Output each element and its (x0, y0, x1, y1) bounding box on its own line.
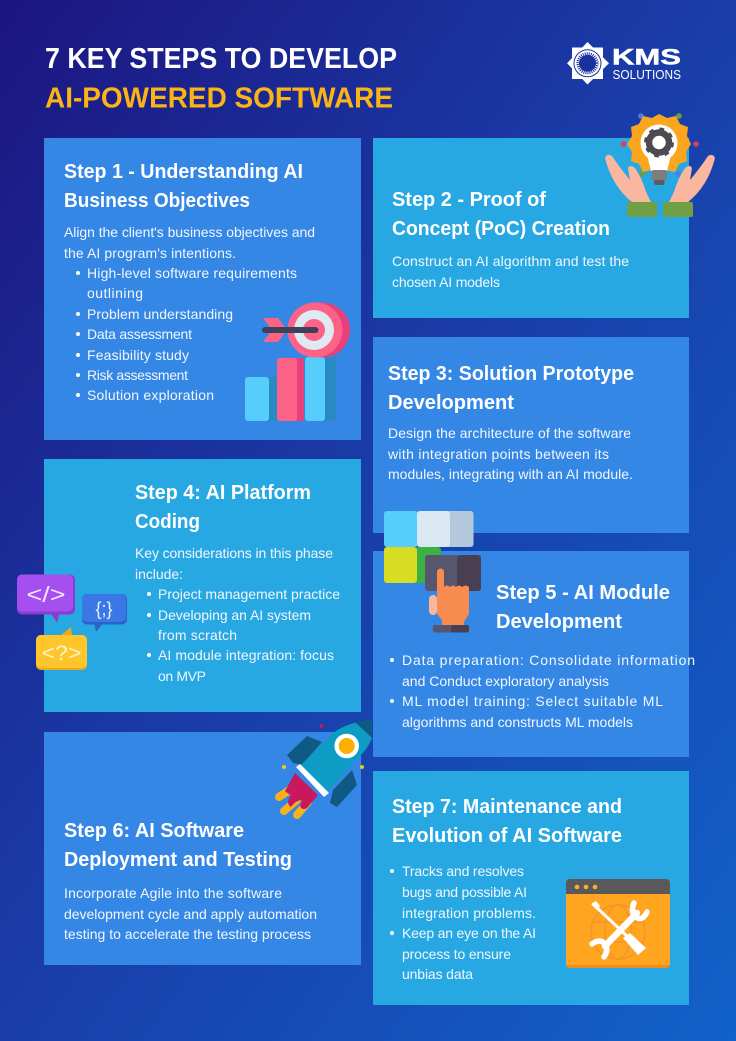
icon: code chat bubbles: <?> (42, 642, 82, 665)
heading: step 2: Step 2 - Proof of (392, 188, 546, 211)
heading: step 5: Step 5 - AI Module (496, 581, 670, 604)
heading: step 3 (388, 362, 634, 414)
heading: step 5 (496, 581, 670, 633)
heading: step 7: Step 7: Maintenance and (392, 795, 622, 818)
heading: step 5: Development (496, 610, 622, 633)
heading: step 2 (392, 188, 610, 240)
list: step 7 bullets (390, 863, 536, 982)
heading: step 7: Evolution of AI Software (392, 824, 622, 847)
heading: step 1: Business Objectives (64, 189, 250, 212)
logo: KMS Solutions (567, 42, 681, 84)
list: step 5 bullets: ML model training: Select suitable ML (402, 693, 663, 709)
text: step 4 intro: Key considerations in this phase (135, 545, 333, 561)
list: step 1 bullets: High-level software requirements (87, 265, 297, 281)
title: AI-POWERED SOFTWARE (45, 82, 393, 114)
list: step 4 bullets: AI module integration: focus (158, 647, 334, 663)
text: step 2 body: Construct an AI algorithm and test the (392, 253, 629, 269)
list: step 1 bullets: Feasibility study (87, 347, 189, 363)
icon: hand pressing colour tiles (384, 511, 481, 632)
list: step 7 bullets: integration problems. (402, 905, 536, 921)
panel: step 3 (373, 337, 689, 533)
heading: step 4: Step 4: AI Platform (135, 481, 311, 504)
panel: step 1 (44, 138, 361, 440)
panel: step 2 (373, 138, 689, 318)
heading: step 6: Deployment and Testing (64, 848, 292, 871)
text: step 6 body (64, 885, 317, 942)
list: step 4 bullets: from scratch (158, 627, 237, 643)
list: step 5 bullets (390, 652, 695, 730)
logo: KMS Solutions: KMS (612, 44, 681, 70)
list: step 7 bullets: Tracks and resolves (402, 863, 524, 879)
title (45, 43, 397, 114)
text: step 3 body: modules, integrating with an AI module. (388, 466, 633, 482)
list: step 1 bullets: Problem understanding (87, 306, 233, 322)
text: step 4 intro (135, 545, 333, 582)
title: 7 KEY STEPS TO DEVELOP (45, 43, 397, 75)
list: step 7 bullets: process to ensure (402, 946, 511, 962)
list: step 7 bullets: unbias data (402, 966, 473, 982)
text: step 1 intro: the AI program's intentions. (64, 245, 236, 261)
icon: light bulb with gear held by hands (605, 113, 715, 217)
text: step 6 body: development cycle and apply automation (64, 906, 317, 922)
icon: code chat bubbles: {;} (95, 599, 113, 619)
icon: browser window with tools (566, 879, 670, 968)
list: step 5 bullets: algorithms and constructs ML models (402, 714, 633, 730)
text: step 1 intro: Align the client's business objectives and (64, 224, 315, 240)
text: step 6 body: testing to accelerate the testing process (64, 926, 311, 942)
heading: step 2: Concept (PoC) Creation (392, 217, 610, 240)
heading: step 3: Development (388, 391, 514, 414)
list: step 4 bullets (147, 586, 340, 684)
heading: step 1: Step 1 - Understanding AI (64, 160, 303, 183)
list: step 5 bullets: Data preparation: Consolidate information (402, 652, 695, 668)
panel: step 7 (373, 771, 689, 1005)
heading: step 4: Coding (135, 510, 200, 533)
list: step 1 bullets (76, 265, 297, 403)
heading: step 4 (135, 481, 311, 533)
text: step 3 body (387, 425, 633, 482)
logo: KMS Solutions: SOLUTIONS (612, 68, 681, 82)
list: step 7 bullets: bugs and possible AI (402, 884, 527, 900)
list: step 1 bullets: Solution exploration (87, 387, 214, 403)
heading: step 3: Step 3: Solution Prototype (388, 362, 634, 385)
text: step 6 body: Incorporate Agile into the software (64, 885, 282, 901)
text: step 1 intro (64, 224, 315, 261)
heading: step 7 (392, 795, 622, 847)
heading: step 6: Step 6: AI Software (64, 819, 244, 842)
text: step 3 body: with integration points between its (387, 446, 609, 462)
panel: step 5 (373, 551, 695, 757)
icon: code chat bubbles (17, 574, 127, 670)
panel: step 4 (44, 459, 361, 712)
text: step 2 body (392, 253, 629, 290)
text: step 4 intro: include: (135, 566, 183, 582)
icon: target and bar chart (245, 302, 350, 421)
heading: step 1 (64, 160, 303, 212)
list: step 1 bullets: outlining (87, 285, 143, 301)
panel: step 6 (44, 732, 361, 965)
list: step 1 bullets: Data assessment (87, 326, 192, 342)
icon: rocket (279, 720, 372, 815)
list: step 1 bullets: Risk assessment (87, 367, 188, 383)
list: step 4 bullets: Project management practice (158, 586, 340, 602)
icon: code chat bubbles: </> (26, 582, 66, 607)
text: step 2 body: chosen AI models (392, 274, 500, 290)
list: step 4 bullets: Developing an AI system (158, 607, 311, 623)
heading: step 6 (64, 819, 292, 871)
list: step 4 bullets: on MVP (158, 668, 206, 684)
list: step 5 bullets: and Conduct exploratory analysis (402, 673, 609, 689)
text: step 3 body: Design the architecture of the software (388, 425, 631, 441)
list: step 7 bullets: Keep an eye on the AI (402, 925, 536, 941)
